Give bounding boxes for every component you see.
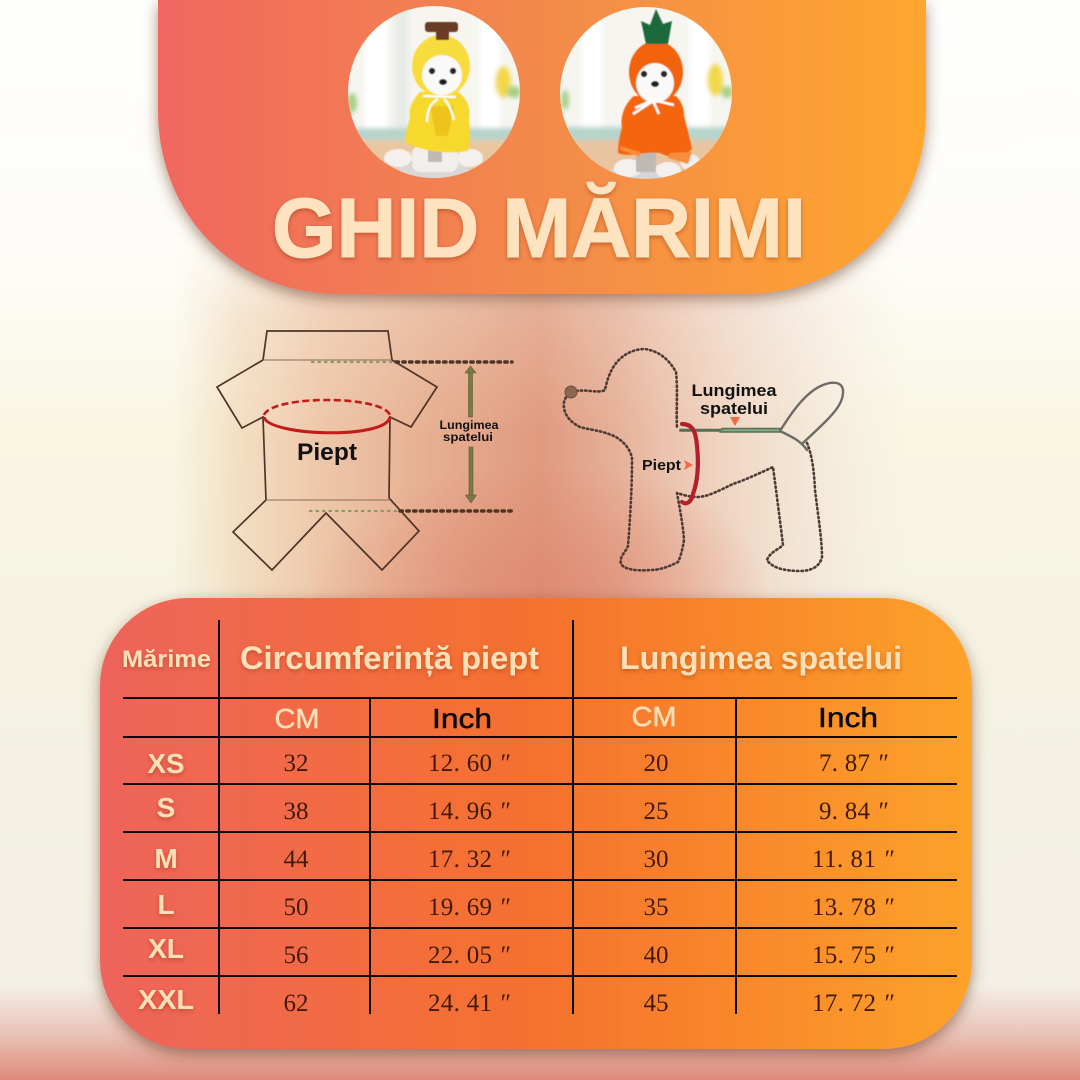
photo: dog in orange carrot hoodie — [560, 6, 733, 180]
table headers: Mărime — [122, 646, 211, 673]
label: back length — [440, 420, 499, 444]
column: back inch: ″ — [877, 798, 888, 825]
unit headers: Inch — [818, 702, 878, 733]
column: back inch: 15. 75 — [812, 942, 876, 969]
label: back length: Lungimea — [440, 420, 499, 432]
column: chest inch: ″ — [499, 750, 510, 777]
column: back cm: 20 — [644, 750, 668, 777]
column: back cm: 45 — [644, 990, 668, 1017]
column: back inch: ″ — [883, 846, 894, 873]
column: back inch: ″ — [883, 990, 894, 1017]
label: Piept: Piept — [297, 439, 357, 466]
column: chest inch: 14. 96 — [428, 798, 492, 825]
column: chest cm: 32 — [284, 750, 308, 777]
column: chest inch: 12. 60 — [428, 750, 492, 777]
label: back length: spatelui — [443, 432, 493, 444]
size labels: M — [154, 843, 178, 874]
panel: size table — [100, 598, 972, 1049]
table headers: Lungimea spatelui — [620, 640, 902, 676]
column: chest inch: ″ — [499, 798, 510, 825]
column: chest cm: 56 — [284, 942, 308, 969]
chest measure line — [682, 424, 698, 503]
unit headers: Inch — [432, 703, 492, 734]
chest measure ellipse — [264, 400, 390, 433]
column: back cm: 30 — [644, 846, 668, 873]
photo: dog in yellow banana hoodie — [347, 6, 521, 180]
garment outline — [217, 331, 437, 570]
column: chest inch: ″ — [499, 894, 510, 921]
column: chest inch: ″ — [499, 990, 510, 1017]
size labels: XS — [148, 748, 184, 779]
column: chest cm: 44 — [284, 846, 309, 873]
column: chest inch: 24. 41 — [428, 990, 492, 1017]
arrow: back length — [730, 417, 740, 426]
column: chest inch: ″ — [499, 942, 510, 969]
dotted guide lines — [310, 362, 512, 511]
column: back inch: 9. 84 — [819, 798, 870, 825]
column: back cm: 35 — [644, 894, 668, 921]
title: GHID MĂRIMI — [272, 181, 806, 275]
unit headers — [274, 701, 878, 734]
column: chest cm — [284, 750, 309, 1017]
panel: header banner — [158, 0, 926, 294]
table headers — [122, 640, 902, 676]
column: back inch: 11. 81 — [812, 846, 876, 873]
column: chest inch: ″ — [499, 846, 510, 873]
size labels — [138, 748, 194, 1015]
column: back inch: 17. 72 — [812, 990, 876, 1017]
column: chest cm: 62 — [284, 990, 308, 1017]
dog nose — [565, 386, 577, 398]
label: Piept: Piept — [642, 457, 681, 474]
column: back cm: 25 — [644, 798, 668, 825]
column: chest cm: 38 — [284, 798, 308, 825]
column: back inch: ″ — [883, 942, 894, 969]
table grid — [123, 620, 957, 1014]
label: back length: Lungimea — [692, 381, 777, 400]
arrow: chest — [684, 460, 693, 470]
dog outline — [564, 349, 843, 571]
column: back inch: 7. 87 — [819, 750, 870, 777]
column: chest inch: 17. 32 — [428, 846, 492, 873]
label: back length — [692, 381, 777, 418]
table headers: Circumferință piept — [240, 640, 539, 676]
size labels: L — [157, 889, 175, 920]
column: chest inch — [428, 750, 510, 1017]
size labels: XL — [148, 933, 184, 964]
size labels: XXL — [138, 984, 194, 1015]
column: back inch: 13. 78 — [812, 894, 876, 921]
column: chest inch: 19. 69 — [428, 894, 492, 921]
column: back inch: ″ — [877, 750, 888, 777]
column: chest inch: 22. 05 — [428, 942, 492, 969]
diagram: garment measurement — [217, 331, 512, 570]
column: back cm — [644, 750, 668, 1017]
diagram: dog measurement — [564, 349, 843, 571]
column: back inch — [812, 750, 894, 1017]
column: back inch: ″ — [883, 894, 894, 921]
size labels: S — [157, 792, 175, 823]
measurement arrows — [465, 366, 476, 503]
label: back length: spatelui — [700, 399, 768, 418]
unit headers: CM — [274, 703, 320, 734]
column: back cm: 40 — [644, 942, 668, 969]
unit headers: CM — [632, 701, 676, 732]
column: chest cm: 50 — [284, 894, 308, 921]
back length line — [680, 428, 780, 432]
